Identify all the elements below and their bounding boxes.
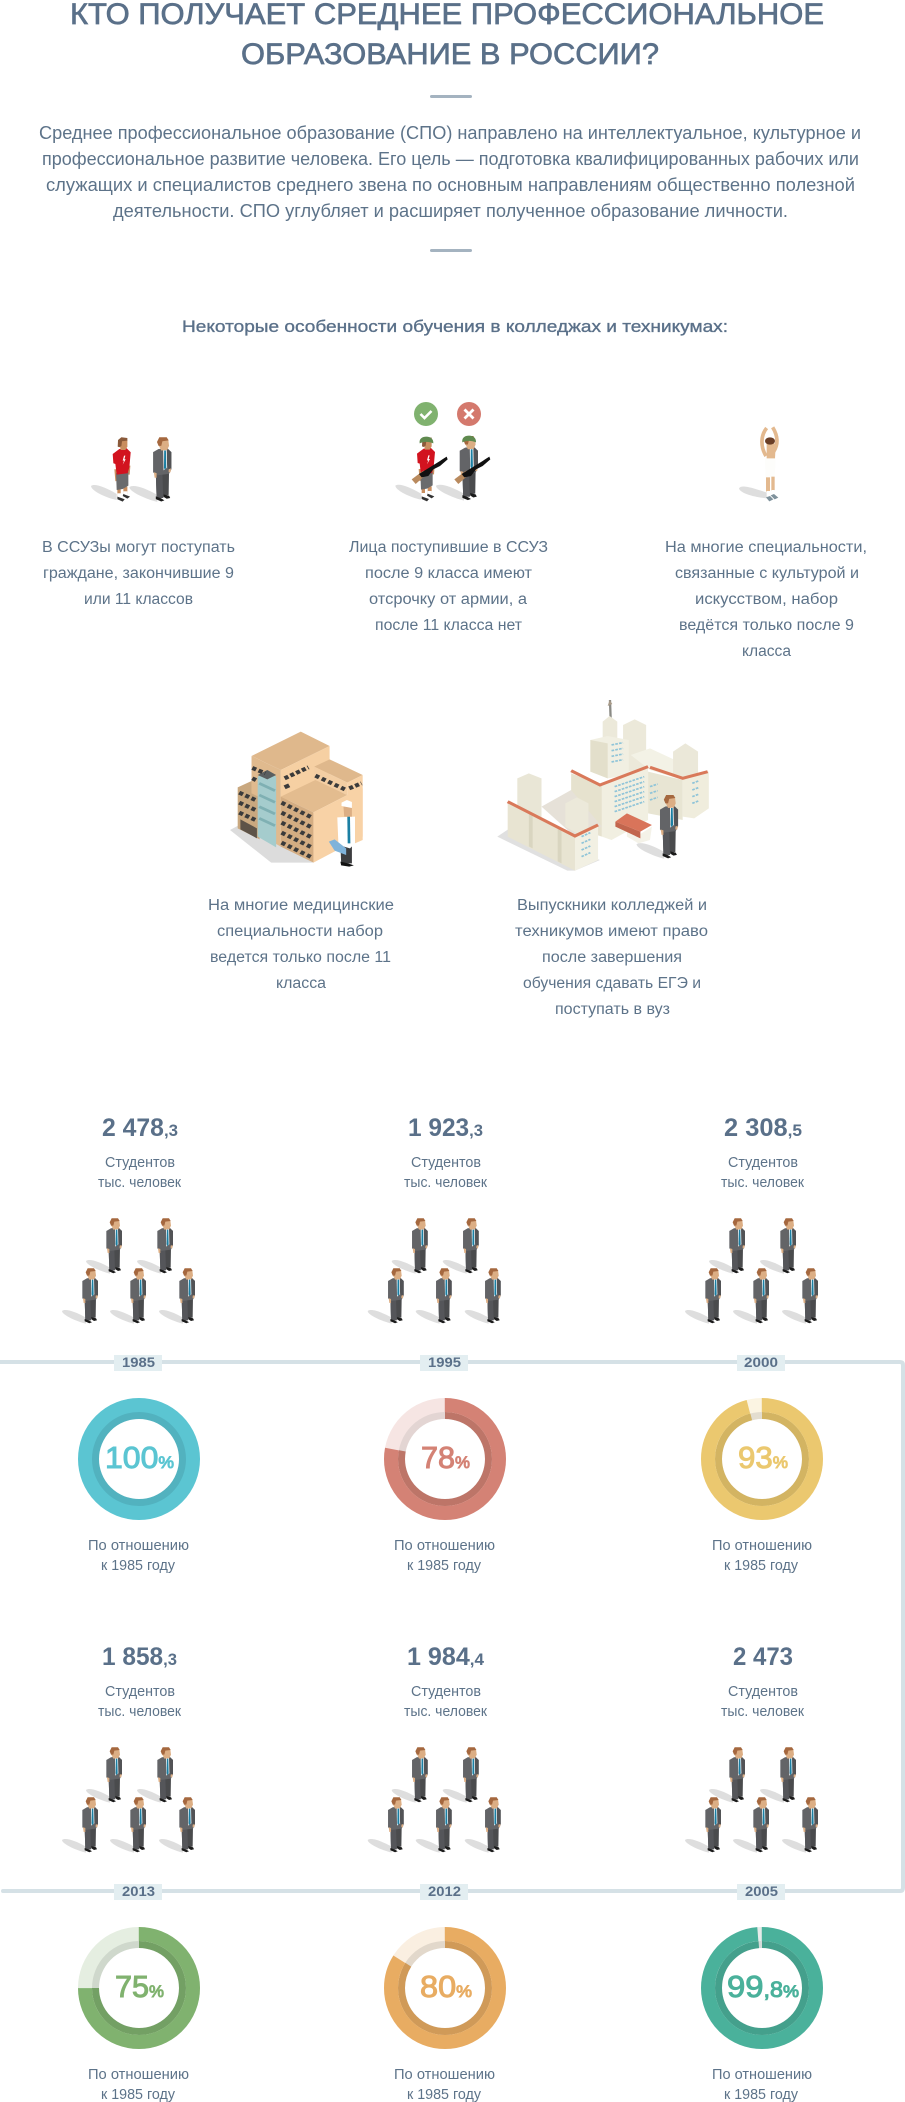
feature 3 text: искусством, набор (695, 591, 838, 608)
students caption 2000 (721, 1155, 805, 1191)
icon: student and graduate (91, 437, 171, 502)
feature 5 text (515, 897, 708, 1018)
students caption 1995: тыс. человек (404, 1175, 488, 1191)
students caption 2005: тыс. человек (721, 1704, 805, 1720)
donut caption 1995: к 1985 году (407, 1558, 482, 1574)
intro paragraph: деятельности. СПО углубляет и расширяет полученное образование личности. (113, 201, 788, 221)
donut caption 2012: По отношению (394, 2067, 495, 2083)
feature 1 text: граждане, закончившие 9 (43, 565, 234, 582)
feature 5 text: Выпускники колледжей и (517, 897, 707, 914)
students caption 2005: Студентов (728, 1684, 798, 1700)
panel: 2000 (685, 1114, 818, 1574)
donut caption 1985: По отношению (88, 1538, 189, 1554)
students caption 2012: тыс. человек (404, 1704, 488, 1720)
feature 5 text: обучения сдавать ЕГЭ и (523, 975, 701, 992)
year label 2005: 2005 (745, 1883, 778, 1899)
donut caption 2012 (394, 2067, 495, 2102)
feature 4 text: класса (276, 975, 326, 992)
panel: feature 2 (349, 402, 548, 634)
feature 1 text (42, 539, 235, 608)
icon: five students (685, 1218, 818, 1324)
students caption 2012: Студентов (411, 1684, 481, 1700)
feature 5 text: техникумов имеют право (515, 923, 708, 940)
feature 3 text: На многие специальности, (665, 539, 867, 556)
donut caption 2000: к 1985 году (724, 1558, 799, 1574)
students caption 2005 (721, 1684, 805, 1720)
panel: 1995 (368, 1114, 501, 1574)
donut chart 99,8% (708, 1934, 816, 2042)
title (70, 0, 824, 71)
students caption 2000: Студентов (728, 1155, 798, 1171)
donut chart 100%: 100% (105, 1440, 174, 1475)
panel: 1985 (62, 1114, 195, 1574)
feature 4 text: ведется только после 11 (210, 949, 391, 966)
icon: five students (62, 1218, 195, 1324)
students count 2013: 1 858,3 (102, 1643, 177, 1671)
donut caption 1985 (88, 1538, 189, 1574)
donut caption 2000: По отношению (712, 1538, 812, 1554)
students caption 2013: тыс. человек (98, 1704, 182, 1720)
intro paragraph (39, 123, 861, 221)
donut chart 80%: 80% (420, 1969, 472, 2004)
year label 2005 (737, 1883, 785, 1900)
feature 4 text: На многие медицинские (208, 897, 394, 914)
students count 2005: 2 473 (733, 1643, 793, 1671)
year label 2000 (737, 1354, 785, 1371)
students caption 1985: тыс. человек (98, 1175, 182, 1191)
donut caption 1995: По отношению (394, 1538, 495, 1554)
donut caption 2000 (712, 1538, 812, 1574)
icon: five students (685, 1747, 818, 1853)
year label 1985: 1985 (122, 1354, 155, 1370)
panel: feature 4 (208, 732, 394, 992)
feature 5 text: после завершения (542, 949, 682, 966)
donut chart 99,8%: 99,8% (727, 1969, 799, 2004)
year label 2013: 2013 (122, 1883, 155, 1899)
icon: university building with graduate (497, 700, 709, 871)
feature 2 text: Лица поступившие в ССУЗ (349, 539, 548, 556)
panel: feature 1 (42, 437, 235, 608)
students caption 2000: тыс. человек (721, 1175, 805, 1191)
year label 1995: 1995 (428, 1354, 461, 1370)
feature 1 text: В ССУЗы могут поступать (42, 539, 235, 556)
feature 2 text: после 11 класса нет (375, 617, 522, 634)
donut chart 78% (391, 1405, 499, 1513)
feature 5 text: поступать в вуз (555, 1001, 670, 1018)
feature 4 text: специальности набор (217, 923, 383, 940)
donut chart 75% (85, 1934, 193, 2042)
students caption 2013 (98, 1684, 182, 1720)
panel: feature 5 (497, 700, 709, 1018)
donut chart 100% (85, 1405, 193, 1513)
donut caption 2013 (88, 2067, 189, 2102)
timeline connector line (0, 1362, 903, 1891)
year label 1995 (420, 1354, 468, 1371)
icon: dancer (739, 427, 778, 501)
donut chart 80% (391, 1934, 499, 2042)
icon: five students (368, 1218, 501, 1324)
icon: hospital building with doctor (230, 732, 363, 867)
feature 4 text (208, 897, 394, 992)
year label 2012: 2012 (428, 1883, 461, 1899)
students caption 1995: Студентов (411, 1155, 481, 1171)
donut caption 2013: По отношению (88, 2067, 189, 2083)
students caption 1985 (98, 1155, 182, 1191)
feature 3 text: связанные с культурой и (675, 565, 859, 582)
feature 2 text: отсрочку от армии, а (369, 591, 527, 608)
donut chart 78%: 78% (421, 1440, 470, 1475)
icon: soldiers with rifles (395, 436, 490, 501)
feature 3 text: ведётся только после 9 (679, 617, 854, 634)
students count 2000: 2 308,5 (724, 1114, 802, 1142)
intro paragraph: профессиональное развитие человека. Его цель — подготовка квалифицированных рабочих или (42, 149, 859, 169)
students caption 2012 (404, 1684, 488, 1720)
panel: 2013 (62, 1643, 195, 2102)
donut caption 1995 (394, 1538, 495, 1574)
panel: 2012 (368, 1643, 501, 2102)
feature 2 text (349, 539, 548, 634)
students caption 1995 (404, 1155, 488, 1191)
donut chart 93% (708, 1405, 816, 1513)
year label 2012 (420, 1883, 468, 1900)
feature 3 text: класса (742, 643, 791, 660)
students count 2012: 1 984,4 (407, 1643, 485, 1671)
intro paragraph: служащих и специалистов среднего звена по основным направлениям общественно полезной (46, 175, 855, 195)
intro paragraph: Среднее профессиональное образование (СПО) направлено на интеллектуальное, культурное и (39, 123, 861, 143)
feature 1 text: или 11 классов (84, 591, 193, 608)
year label 2000: 2000 (744, 1354, 778, 1370)
donut chart 75%: 75% (115, 1969, 164, 2004)
feature 3 text (665, 539, 867, 660)
students count 1985: 2 478,3 (102, 1114, 178, 1142)
icon: five students (368, 1747, 501, 1853)
students caption 2013: Студентов (105, 1684, 175, 1700)
icon: five students (62, 1747, 195, 1853)
panel: 2005 (685, 1643, 818, 2102)
feature 2 text: после 9 класса имеют (365, 565, 532, 582)
students caption 1985: Студентов (105, 1155, 175, 1171)
subheading: Некоторые особенности обучения в колледжах и техникумах: (182, 317, 728, 336)
panel: feature 3 (665, 427, 867, 660)
icon: check and cross badges (414, 402, 481, 426)
title: ОБРАЗОВАНИЕ В РОССИИ? (241, 38, 659, 71)
donut caption 2005: По отношению (712, 2067, 812, 2083)
donut caption 1985: к 1985 году (101, 1558, 176, 1574)
year label 2013 (114, 1883, 162, 1900)
donut caption 2005 (712, 2067, 812, 2102)
donut chart 93%: 93% (738, 1440, 788, 1475)
year label 1985 (114, 1354, 162, 1371)
students count 1995: 1 923,3 (408, 1114, 483, 1142)
